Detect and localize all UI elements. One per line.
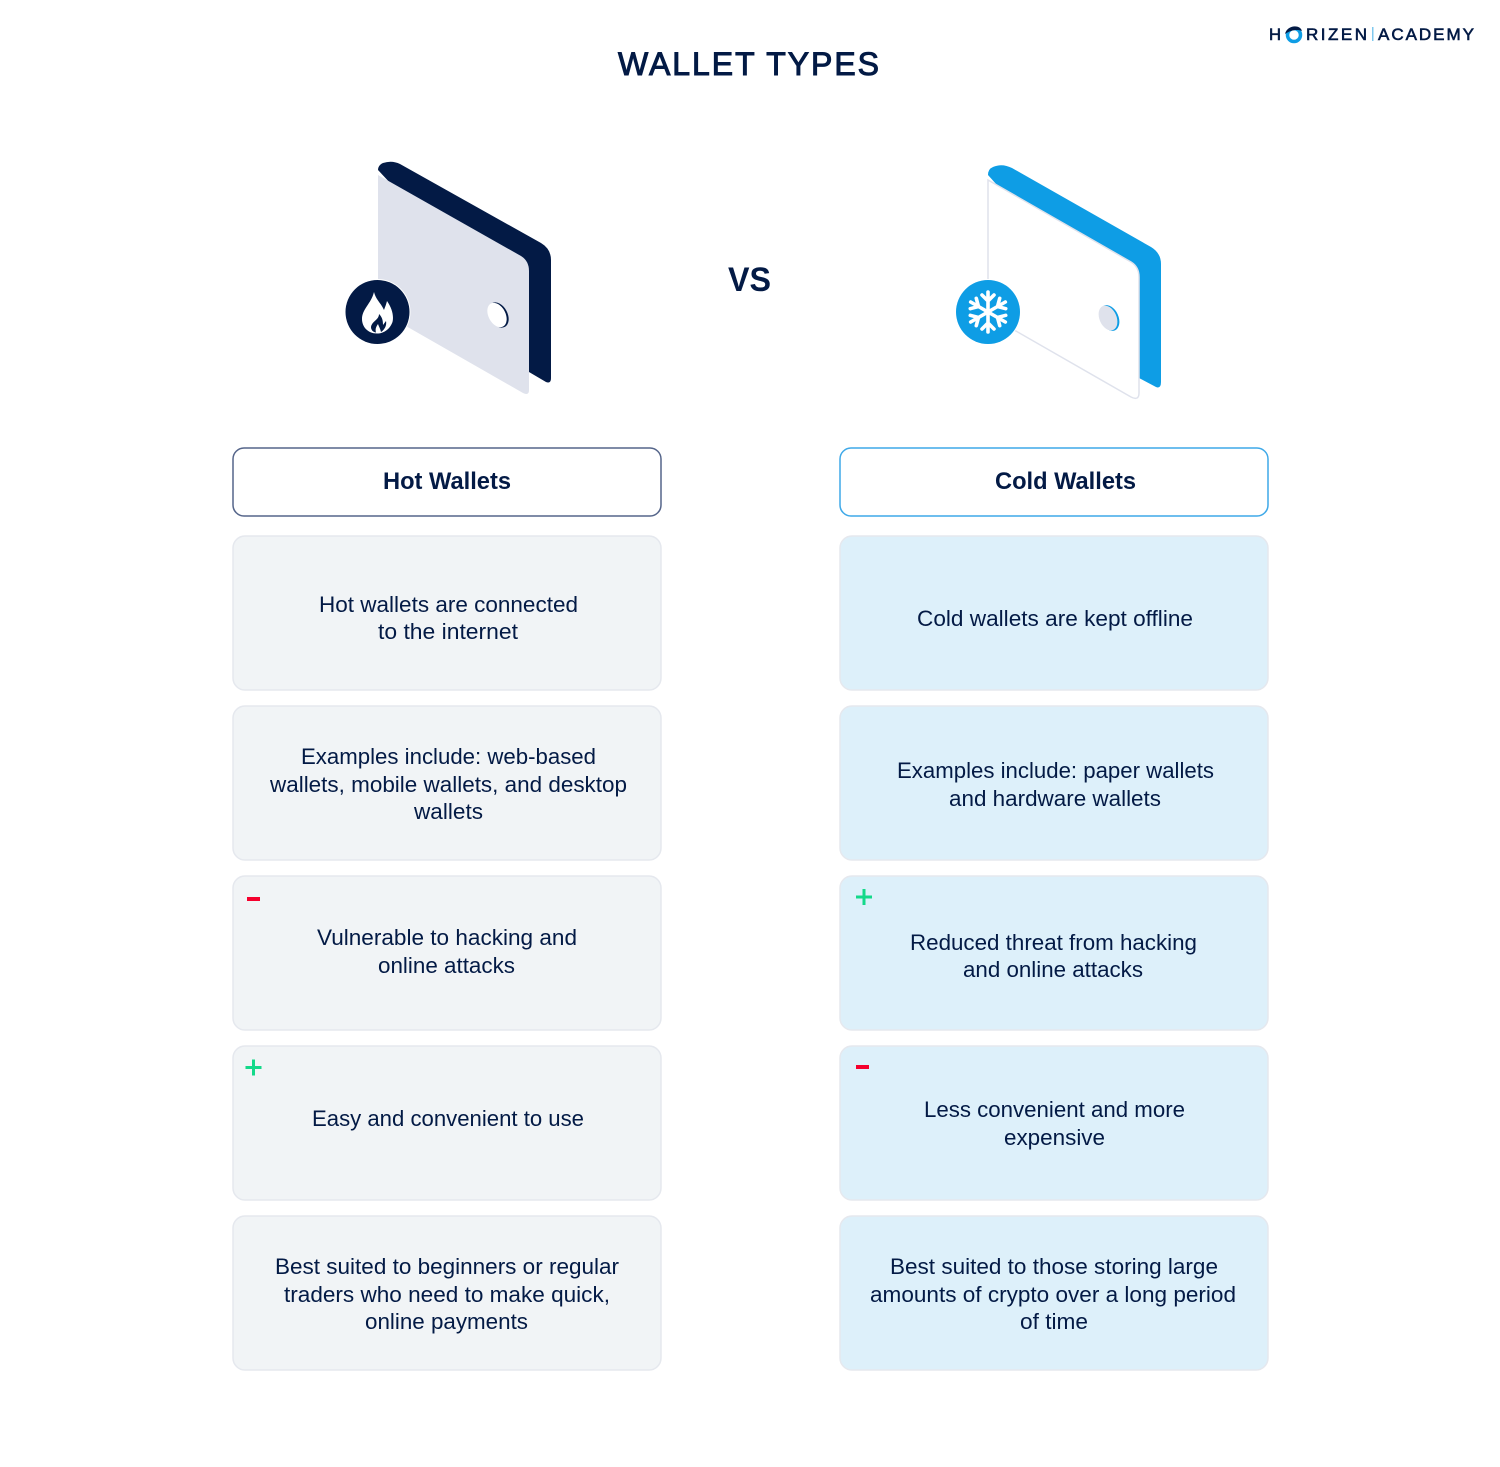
card: convenience drawback: expensive	[1004, 1125, 1105, 1150]
wallet clasp	[1095, 302, 1123, 334]
card: examples	[840, 706, 1268, 860]
icon: cold wallet	[955, 165, 1161, 398]
card: best suited	[840, 1216, 1268, 1370]
card: examples: wallets, mobile wallets, and desktop	[269, 772, 627, 797]
card: security drawback: online attacks	[378, 953, 515, 978]
card: best suited: Best suited to those storing large	[890, 1254, 1218, 1279]
card: examples	[233, 706, 661, 860]
logo: Horizen Academy	[1269, 25, 1474, 44]
card: connectivity: Hot wallets are connected	[319, 592, 578, 617]
panel: hot wallets column	[233, 448, 661, 1370]
wallet back	[378, 162, 551, 382]
heading: cold wallets: Cold Wallets	[995, 468, 1136, 495]
icon: minus	[856, 1065, 869, 1069]
snowflake badge	[955, 279, 1021, 345]
card: best suited: traders who need to make quick,	[284, 1282, 610, 1307]
wallet clasp	[483, 299, 513, 331]
icon: hot wallet	[344, 162, 551, 394]
heading: hot wallets	[233, 448, 661, 516]
card: best suited: Best suited to beginners or regular	[275, 1254, 619, 1279]
card: security drawback: Vulnerable to hacking and	[317, 925, 577, 950]
card: security drawback	[233, 876, 661, 1030]
wallet back	[988, 165, 1161, 387]
card: offline: Cold wallets are kept offline	[917, 606, 1193, 631]
flame badge	[344, 279, 410, 345]
card: best suited	[233, 1216, 661, 1370]
heading: cold wallets	[840, 448, 1268, 516]
card: convenience benefit	[233, 1046, 661, 1200]
icon: minus	[247, 897, 260, 901]
card: security benefit: and online attacks	[963, 957, 1143, 982]
title: WALLET TYPES	[618, 46, 879, 82]
card: convenience drawback: Less convenient and more	[924, 1097, 1185, 1122]
card: best suited: online payments	[365, 1309, 528, 1334]
logo: Horizen Academy: ACADEMY	[1378, 25, 1474, 44]
logo: Horizen Academy: H	[1269, 25, 1281, 44]
icon: plus	[856, 889, 872, 905]
wallet front panel	[988, 180, 1139, 398]
card: examples: and hardware wallets	[949, 786, 1161, 811]
card: best suited: of time	[1020, 1309, 1088, 1334]
icon: plus	[246, 1060, 262, 1076]
card: examples: Examples include: paper wallets	[897, 758, 1214, 783]
card: security benefit	[840, 876, 1268, 1030]
card: offline	[840, 536, 1268, 690]
heading: hot wallets: Hot Wallets	[383, 468, 511, 495]
card: connectivity: to the internet	[378, 619, 518, 644]
card: convenience drawback	[840, 1046, 1268, 1200]
card: security benefit: Reduced threat from hacking	[910, 930, 1197, 955]
card: examples: Examples include: web-based	[301, 744, 596, 769]
card: convenience benefit: Easy and convenient to use	[312, 1106, 584, 1131]
panel: cold wallets column	[840, 448, 1268, 1370]
card: best suited: amounts of crypto over a long period	[870, 1282, 1236, 1307]
wallet front panel	[378, 175, 529, 394]
card: examples: wallets	[413, 799, 483, 824]
card: connectivity	[233, 536, 661, 690]
logo: Horizen Academy: RIZEN	[1306, 25, 1367, 44]
vs label: VS	[728, 261, 771, 299]
